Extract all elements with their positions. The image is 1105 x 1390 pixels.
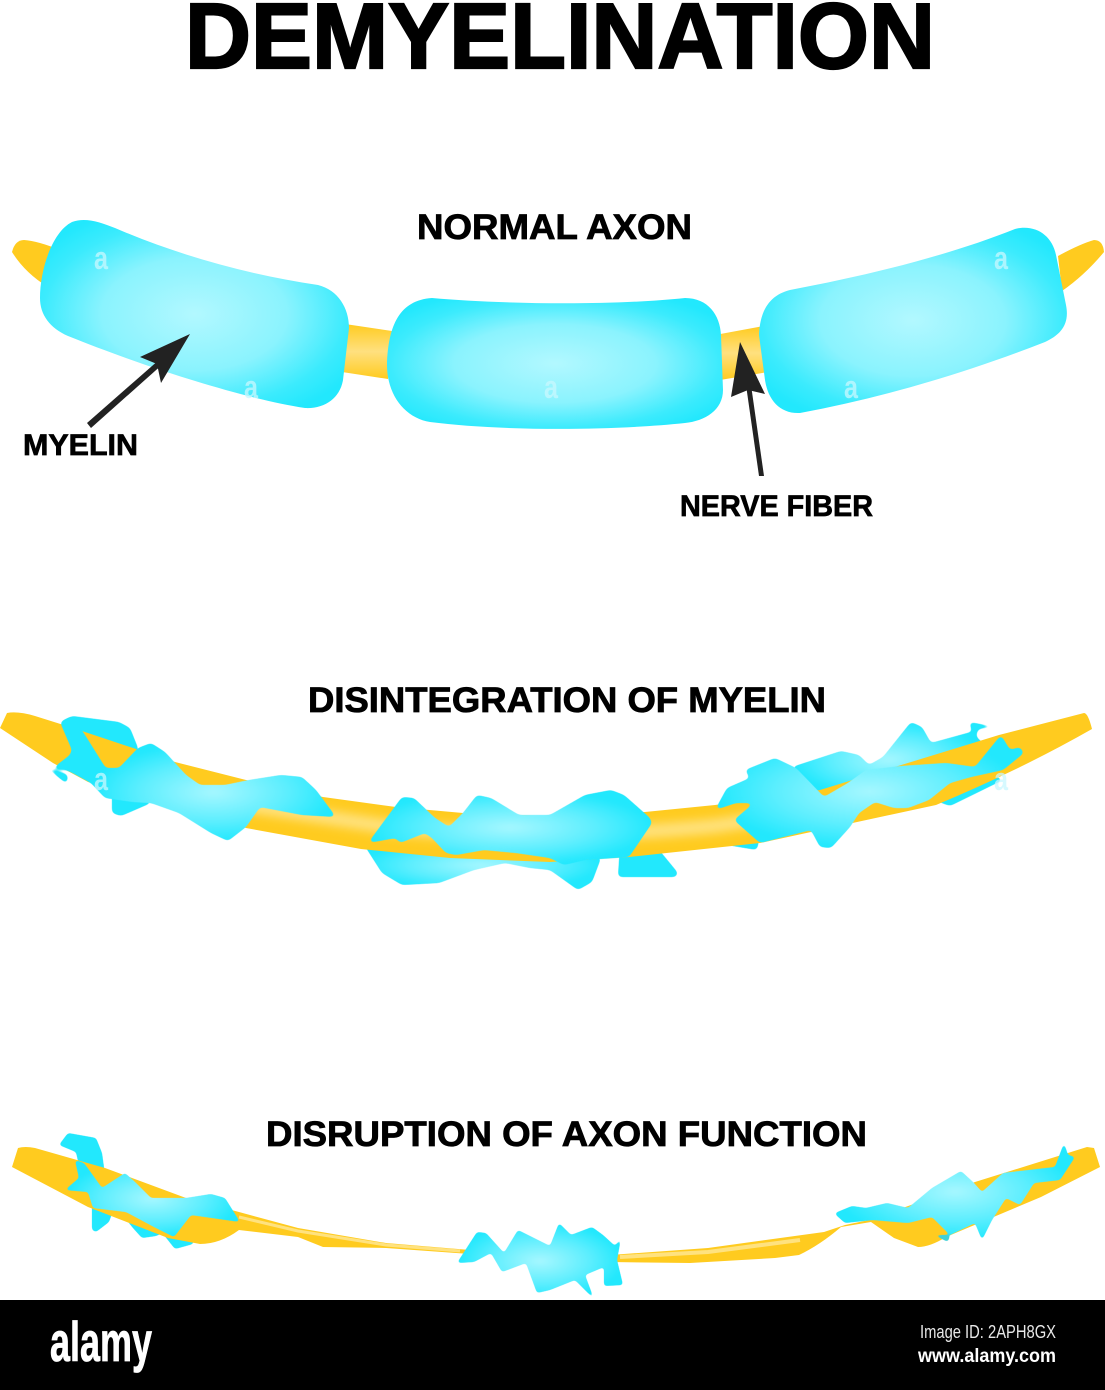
myelin fragments behind the fiber: left — [59, 1133, 195, 1249]
myelin sheath: middle — [387, 298, 723, 429]
watermark letters: a — [994, 761, 1008, 797]
watermark letters: a — [994, 240, 1008, 276]
heading: disruption of axon function: DISRUPTION OF AXON FUNCTION — [266, 1115, 867, 1154]
myelin fragments: centre — [368, 790, 652, 865]
arrow: myelin — [87, 334, 190, 428]
nerve fiber: pale highlight right — [620, 1240, 800, 1257]
myelin fragments: right — [715, 735, 1024, 848]
arrow: nerve fiber — [731, 342, 765, 476]
watermark letters — [94, 240, 1008, 405]
watermark letters: a — [544, 369, 558, 405]
myelin fragments: left — [42, 716, 336, 841]
watermark letters: a — [94, 240, 108, 276]
myelin fragments: right — [835, 1143, 1075, 1242]
label: myelin: MYELIN — [23, 429, 138, 462]
panel: disruption of axon function — [12, 1115, 1100, 1299]
myelin fragments: centre — [457, 1223, 623, 1299]
myelin sheath: right — [759, 228, 1067, 413]
image id: Image ID: 2APH8GX — [920, 1322, 1056, 1342]
panel: normal axon — [12, 208, 1104, 523]
watermark letters: a — [244, 369, 258, 405]
watermark letters: a — [94, 761, 108, 797]
nerve fiber: left part — [12, 1147, 470, 1254]
heading: normal axon: NORMAL AXON — [417, 208, 692, 247]
nerve fiber band — [0, 712, 1092, 862]
nerve fiber segments — [12, 240, 1104, 380]
nerve fiber: right part — [610, 1147, 1100, 1263]
myelin fragments: left — [65, 1160, 240, 1237]
footer bar — [0, 1300, 1105, 1390]
myelin sheath: left — [40, 220, 349, 408]
watermark letters — [94, 761, 1008, 797]
footer logo: alamy — [50, 1310, 152, 1373]
site url: www.alamy.com — [917, 1346, 1056, 1367]
watermark letters: a — [844, 369, 858, 405]
label: nerve fiber: NERVE FIBER — [680, 490, 873, 523]
heading: disintegration of myelin: DISINTEGRATION OF MYELIN — [308, 681, 826, 720]
myelin fragments behind the fiber — [60, 716, 1003, 890]
panel: disintegration of myelin — [0, 681, 1092, 890]
nerve fiber: pale highlight left — [239, 1217, 460, 1251]
